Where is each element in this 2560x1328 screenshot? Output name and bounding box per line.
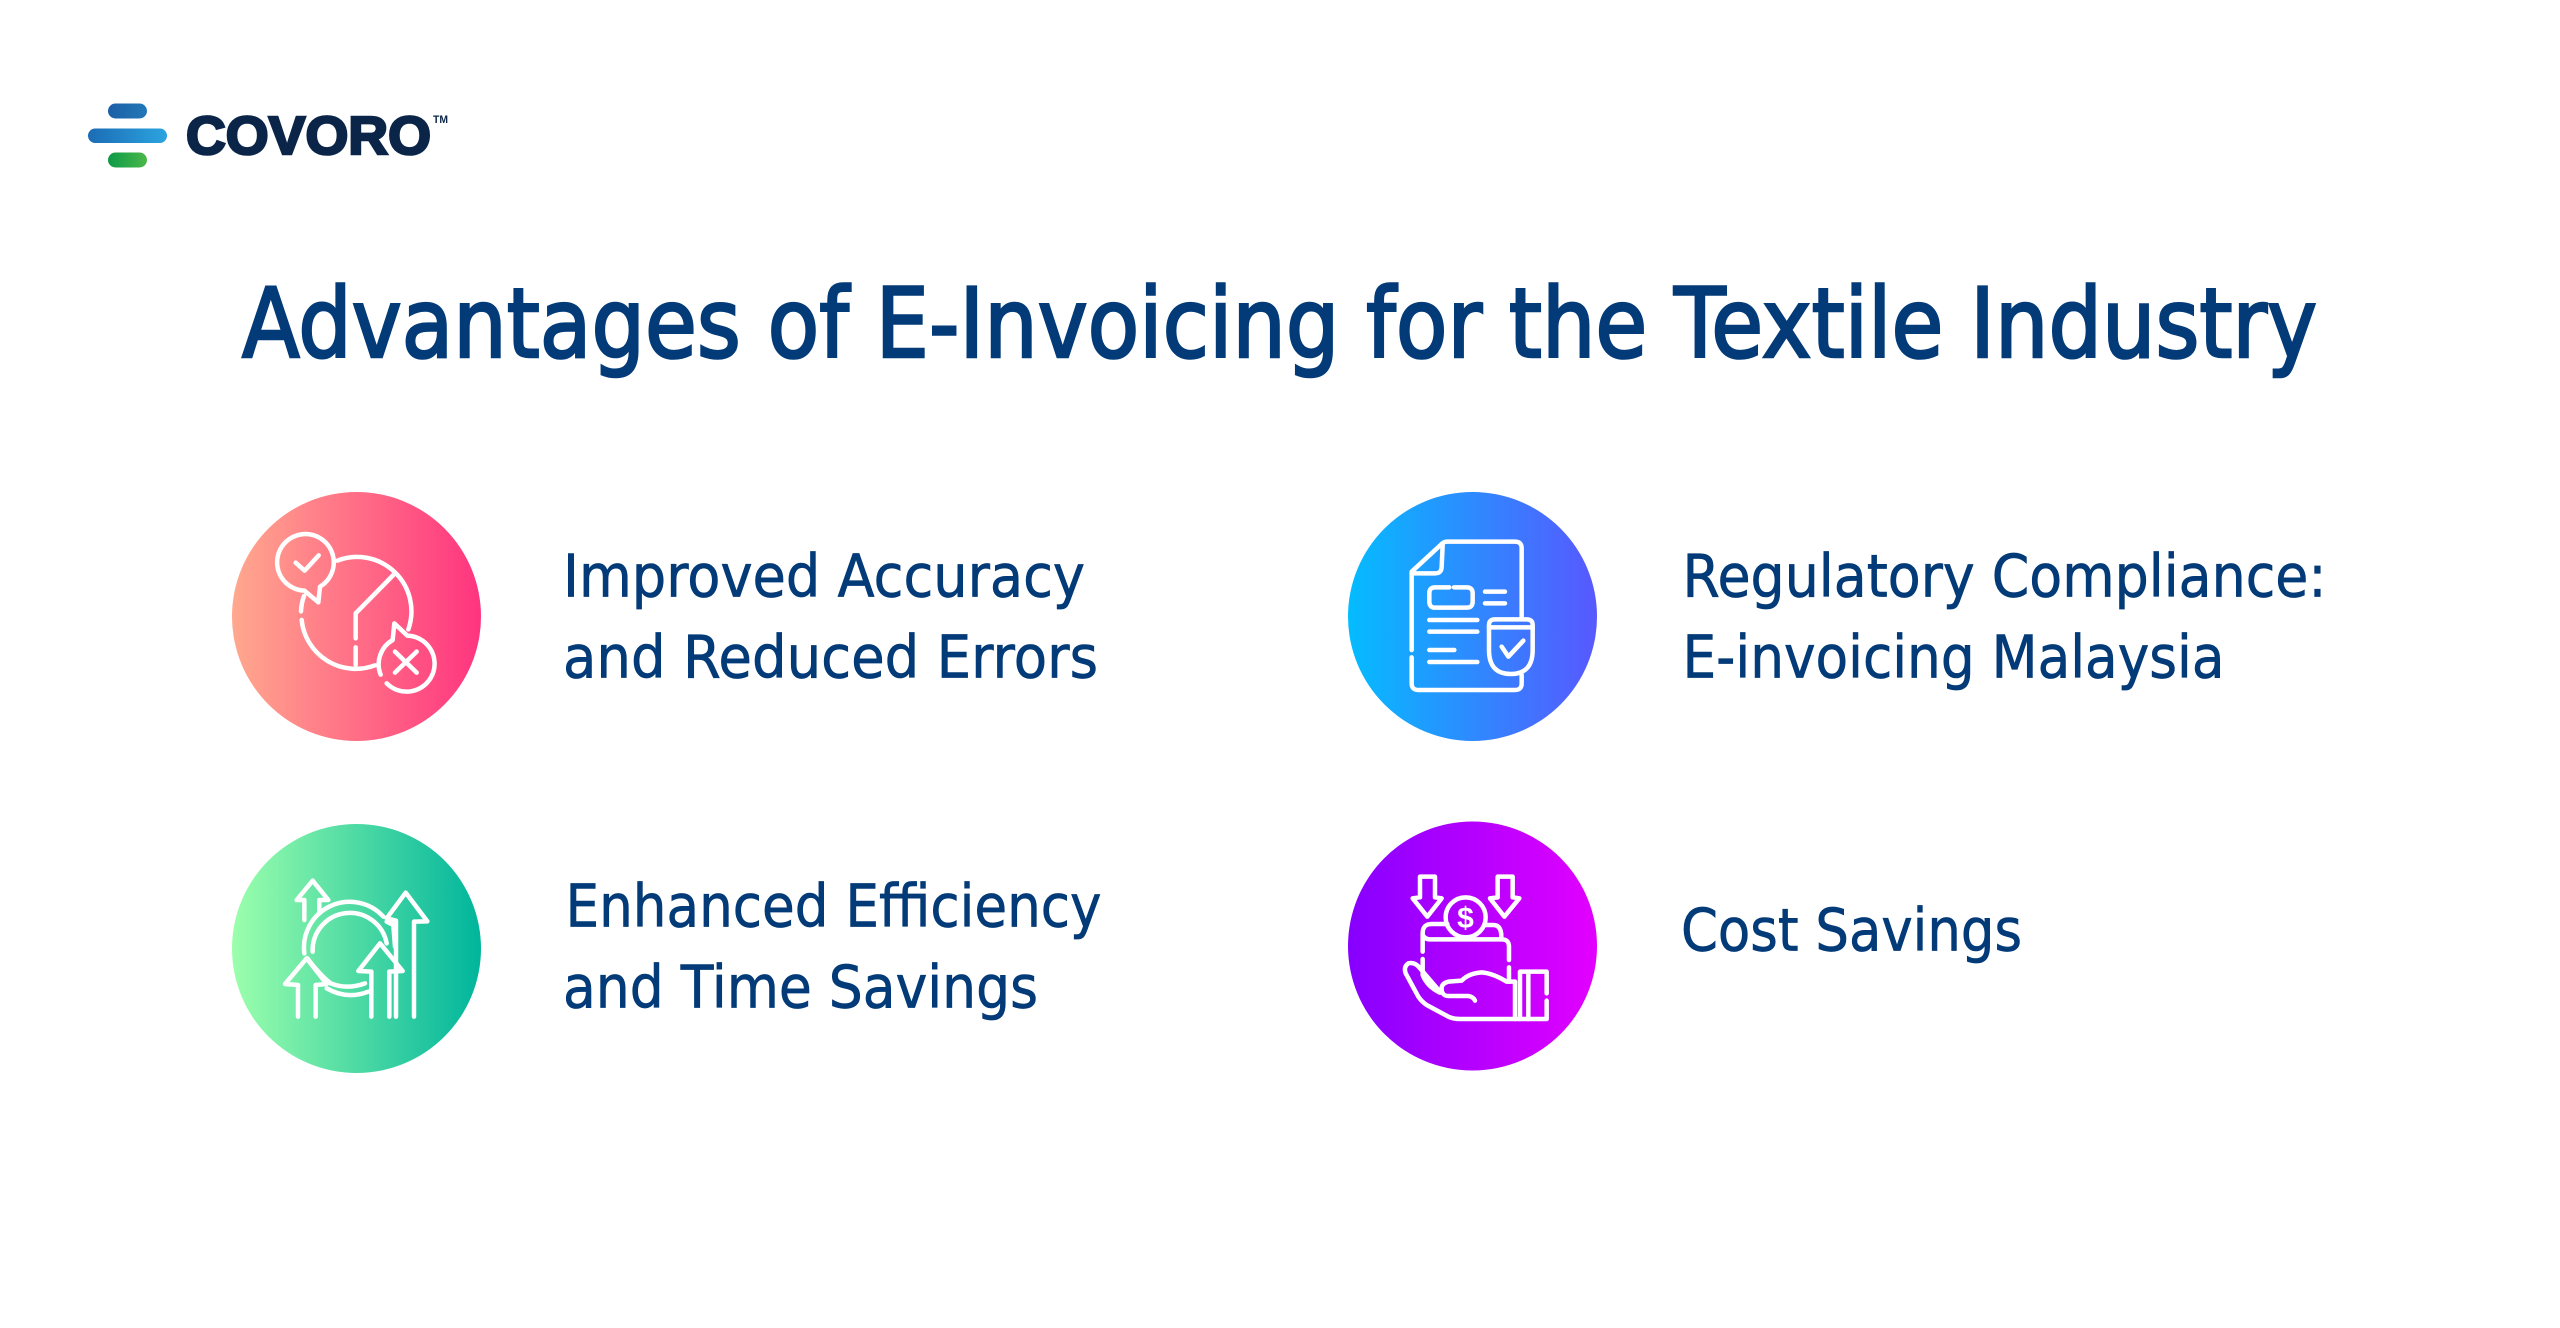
label <box>1682 542 2326 692</box>
label <box>563 542 1098 692</box>
label: Regulatory Compliance: <box>1682 542 2326 610</box>
label: Enhanced Efficiency <box>566 872 1102 940</box>
panel: improved accuracy <box>232 492 1098 741</box>
logo: Covoro <box>88 104 448 168</box>
icon: hand with wallet and coin: $ <box>1457 902 1474 935</box>
panel: cost savings <box>1348 822 2022 1070</box>
title: Advantages of E-Invoicing for the Textile Industry <box>242 268 2317 380</box>
logo wordmark: COVORO <box>186 106 431 166</box>
label: and Time Savings <box>563 952 1038 1022</box>
logo mark: three bars <box>88 104 167 168</box>
panel: regulatory compliance <box>1348 492 2326 741</box>
label: Improved Accuracy <box>563 542 1085 610</box>
label <box>563 872 1102 1022</box>
icon: hand with wallet and coin <box>1348 822 1597 1070</box>
icon: document with shield <box>1348 492 1597 741</box>
icon: clock with check and cross bubbles <box>232 492 481 741</box>
icon: arrows with cycle <box>232 824 481 1073</box>
panel: enhanced efficiency <box>232 824 1102 1073</box>
label: Cost Savings <box>1681 896 2022 964</box>
logo trademark: TM <box>433 114 448 126</box>
label: and Reduced Errors <box>563 622 1098 692</box>
label: E-invoicing Malaysia <box>1682 622 2224 692</box>
